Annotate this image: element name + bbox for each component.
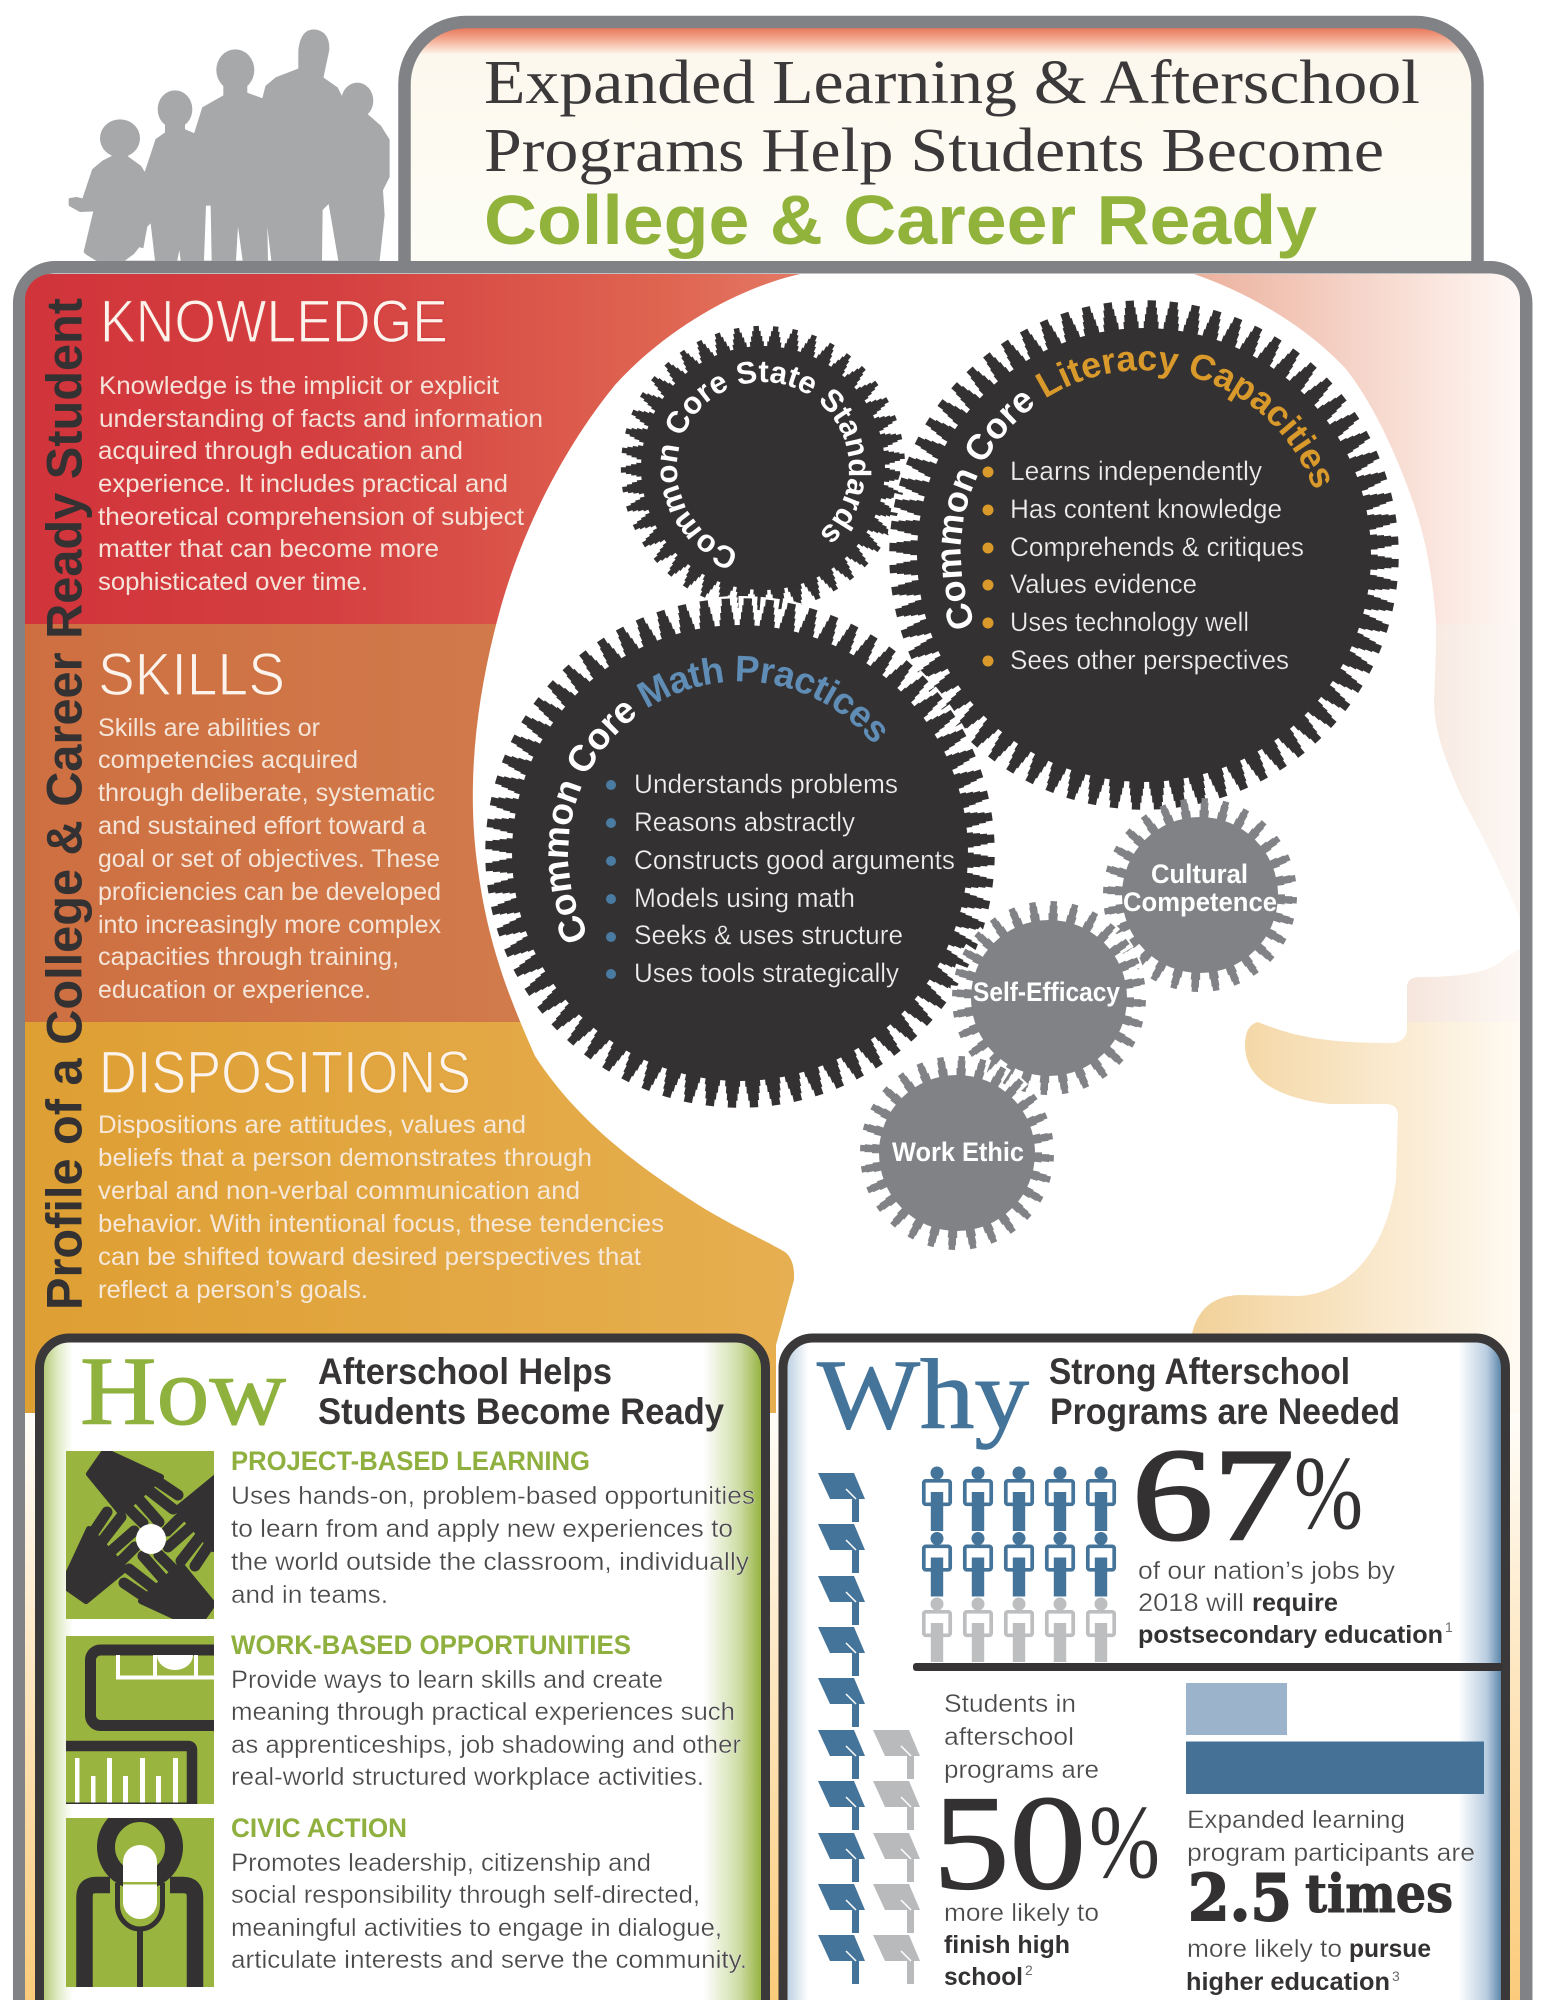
gear: common core state standards <box>620 326 905 610</box>
civic action text: Promotes leadership, citizenship and <box>231 1849 651 1877</box>
literacy list: Uses technology well <box>1010 607 1249 637</box>
why word: Why <box>817 1339 1029 1450</box>
knowledge section <box>98 288 543 596</box>
skills body: through deliberate, systematic <box>98 779 435 807</box>
why heading: Programs are Needed <box>1050 1391 1400 1432</box>
stat: 50 percent: more likely to <box>944 1899 1099 1927</box>
project-based learning text: and in teams. <box>231 1581 388 1609</box>
knowledge body: matter that can become more <box>98 535 439 563</box>
panel: how afterschool helps <box>40 1338 766 2000</box>
math list: Constructs good arguments <box>634 845 955 875</box>
dispositions body: Dispositions are attitudes, values and <box>98 1111 526 1139</box>
stat: 67 percent: 67 <box>1132 1421 1294 1568</box>
gear: cultural competence: Cultural <box>1151 859 1248 889</box>
gear: self-efficacy <box>955 904 1143 1092</box>
vertical heading: Profile of a College & Career Ready Student <box>36 298 92 1310</box>
skills body: into increasingly more complex <box>98 911 441 939</box>
project-based learning text <box>231 1446 755 1609</box>
title line 3: College & Career Ready <box>484 181 1317 259</box>
skills body: Skills are abilities or <box>98 714 320 742</box>
project-based learning text: PROJECT-BASED LEARNING <box>231 1446 590 1476</box>
math gear curved label: Common Core Math Practices <box>548 656 886 942</box>
knowledge body: experience. It includes practical and <box>98 470 508 498</box>
knowledge body <box>98 372 543 596</box>
work-based opportunities text: meaning through practical experiences such <box>231 1698 735 1726</box>
literacy list: Comprehends & critiques <box>1010 532 1304 562</box>
stat: 50 percent: programs are <box>944 1756 1099 1784</box>
head silhouette <box>473 274 1521 1420</box>
knowledge heading: KNOWLEDGE <box>100 288 448 355</box>
math list <box>606 769 955 988</box>
stat: 2.5 times: program participants are <box>1187 1839 1475 1867</box>
panel: why afterschool is needed <box>783 1338 1506 2000</box>
literacy list: Has content knowledge <box>1010 494 1282 524</box>
literacy list: Learns independently <box>1010 456 1262 486</box>
math list: Models using math <box>634 883 855 913</box>
skills body: proficiencies can be developed <box>98 878 441 906</box>
pictogram: people grey, one row <box>924 1598 1114 1662</box>
icon: hands <box>66 1451 214 1619</box>
stat: 67 percent: % <box>1294 1434 1363 1551</box>
stat: 50 percent: 50 <box>933 1769 1086 1918</box>
gear: common core math practices <box>485 596 995 1108</box>
how heading: Afterschool Helps <box>318 1351 612 1392</box>
stat: 67 percent: postsecondary education <box>1138 1621 1443 1649</box>
gear: self-efficacy: Self-Efficacy <box>973 977 1120 1007</box>
math list: Seeks & uses structure <box>634 920 903 950</box>
knowledge body: understanding of facts and information <box>99 405 543 433</box>
dispositions body: reflect a person’s goals. <box>98 1276 368 1304</box>
math list: Uses tools strategically <box>634 958 899 988</box>
civic action text: meaningful activities to engage in dialogue, <box>231 1914 722 1942</box>
stat: 67 percent: 2018 will <box>1138 1589 1244 1617</box>
dispositions body: behavior. With intentional focus, these tendencies <box>98 1210 664 1238</box>
bar chart: comparison bars <box>1186 1683 1484 1794</box>
project-based learning text: Uses hands-on, problem-based opportunities <box>231 1482 755 1510</box>
stat: 2.5 times: 3 <box>1392 1968 1400 1984</box>
icon: microphone speaker <box>66 1813 214 1990</box>
how word: How <box>80 1338 286 1445</box>
stat: 2.5 times: 2.5 <box>1188 1861 1292 1936</box>
skills heading: SKILLS <box>98 641 285 708</box>
title panel <box>404 22 1478 342</box>
stat: 50 percent: finish high <box>944 1931 1070 1959</box>
civic action text: social responsibility through self-directed, <box>231 1881 700 1909</box>
literacy list <box>982 456 1304 675</box>
stat: 50 percent: school <box>944 1963 1023 1991</box>
stat: 2.5 times <box>1186 1806 1475 1996</box>
gear: common core state standards: Common Core State Standards <box>660 362 872 568</box>
stat: 2.5 times: pursue <box>1349 1935 1431 1963</box>
stat: 2.5 times: more likely to <box>1187 1935 1342 1963</box>
knowledge body: theoretical comprehension of subject <box>98 503 524 531</box>
knowledge body: Knowledge is the implicit or explicit <box>99 372 499 400</box>
gear: cultural competence: Competence <box>1123 887 1277 917</box>
dispositions heading: DISPOSITIONS <box>99 1039 471 1106</box>
dispositions body <box>98 1111 664 1304</box>
title line 2: Programs Help Students Become <box>484 117 1384 185</box>
why heading: Strong Afterschool <box>1049 1351 1350 1392</box>
knowledge body: acquired through education and <box>98 437 463 465</box>
skills body: and sustained effort toward a <box>98 812 426 840</box>
icon: workplace <box>66 1636 214 1804</box>
how heading: Students Become Ready <box>318 1391 724 1432</box>
stat: 50 percent: Students in <box>944 1690 1076 1718</box>
literacy list: Sees other perspectives <box>1010 645 1289 675</box>
icon column: graduation caps, blue <box>818 1473 865 1984</box>
math list: Reasons abstractly <box>634 807 855 837</box>
why heading <box>1049 1351 1400 1432</box>
stat: 50 percent: afterschool <box>944 1723 1074 1751</box>
dispositions body: can be shifted toward desired perspectives that <box>98 1243 641 1271</box>
stat: 67 percent <box>1132 1421 1453 1649</box>
work-based opportunities text <box>231 1630 741 1791</box>
stat: 50 percent <box>933 1690 1160 1991</box>
gear: common core literacy capacities <box>888 300 1399 810</box>
project-based learning text: to learn from and apply new experiences to <box>231 1515 733 1543</box>
stat: 67 percent: 1 <box>1445 1619 1453 1635</box>
dispositions section <box>98 1039 664 1304</box>
gear: cultural competence <box>1106 801 1294 989</box>
title line 1: Expanded Learning & Afterschool <box>484 49 1420 117</box>
civic action text: CIVIC ACTION <box>231 1813 407 1843</box>
stat: 67 percent: require <box>1252 1589 1338 1617</box>
civic action text: articulate interests and serve the community. <box>231 1946 747 1974</box>
skills body: competencies acquired <box>98 746 358 774</box>
work-based opportunities text: real-world structured workplace activities. <box>231 1763 704 1791</box>
stat: 2.5 times: times <box>1305 1864 1453 1925</box>
knowledge body: sophisticated over time. <box>98 568 368 596</box>
stat: 67 percent: of our nation’s jobs by <box>1138 1557 1396 1585</box>
gear: work ethic: Work Ethic <box>892 1137 1024 1167</box>
dispositions body: beliefs that a person demonstrates through <box>98 1144 592 1172</box>
stat: 2.5 times: higher education <box>1186 1968 1390 1996</box>
work-based opportunities text: as apprenticeships, job shadowing and other <box>231 1731 741 1759</box>
how heading <box>318 1351 724 1432</box>
dispositions body: verbal and non-verbal communication and <box>98 1177 580 1205</box>
skills body: capacities through training, <box>98 943 399 971</box>
work-based opportunities text: WORK-BASED OPPORTUNITIES <box>231 1630 631 1660</box>
stat: 50 percent: % <box>1089 1783 1160 1900</box>
stat: 50 percent: 2 <box>1025 1962 1033 1978</box>
pictogram: people blue, two rows <box>924 1466 1114 1596</box>
skills body <box>98 714 441 1004</box>
skills body: goal or set of objectives. These <box>98 845 440 873</box>
literacy gear curved label: Common Core Literacy Capacities <box>941 351 1330 629</box>
gear: work ethic <box>863 1059 1051 1247</box>
skills section <box>98 641 441 1004</box>
project-based learning text: the world outside the classroom, individually <box>231 1548 750 1576</box>
literacy list: Values evidence <box>1010 569 1197 599</box>
math list: Understands problems <box>634 769 898 799</box>
silhouette of students <box>70 29 388 261</box>
work-based opportunities text: Provide ways to learn skills and create <box>231 1666 663 1694</box>
civic action text <box>231 1813 747 1974</box>
divider <box>913 1663 1503 1671</box>
icon column: graduation caps, grey <box>873 1730 920 1984</box>
skills body: education or experience. <box>98 976 371 1004</box>
stat: 2.5 times: Expanded learning <box>1187 1806 1405 1834</box>
